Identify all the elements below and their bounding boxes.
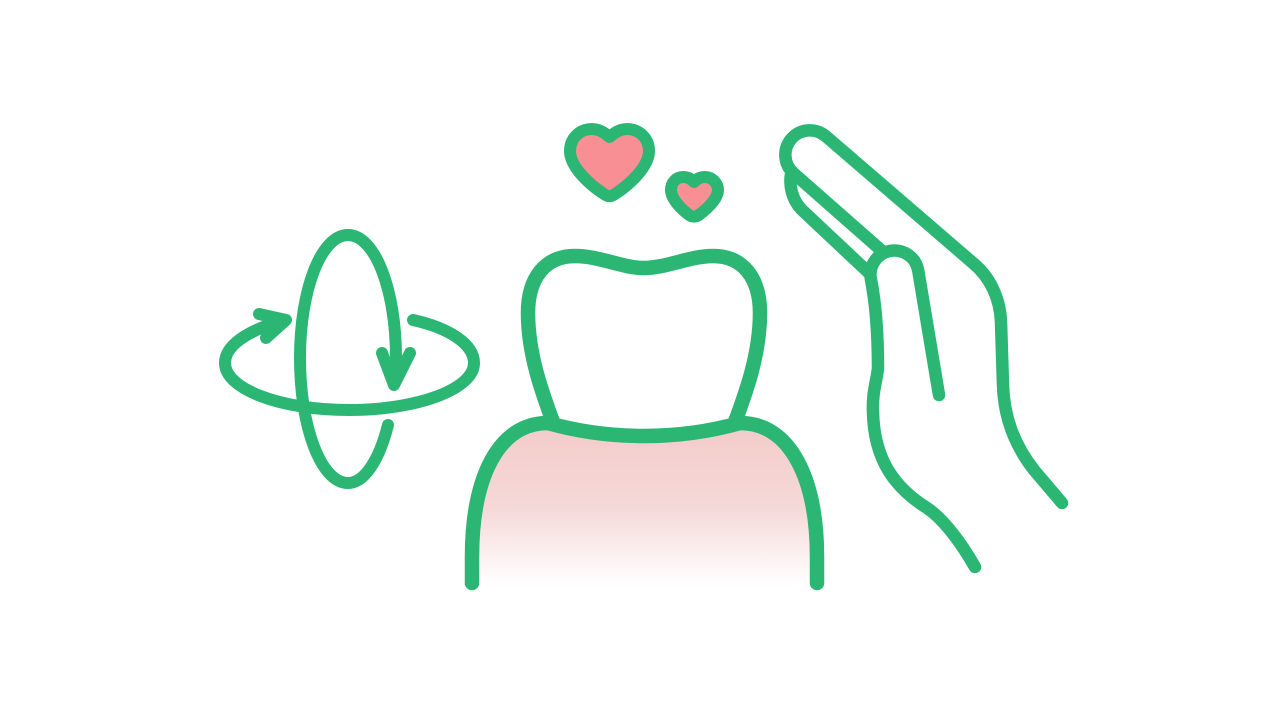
icon: large heart xyxy=(570,129,649,196)
tooth crown xyxy=(528,256,760,422)
icon: hand with floss xyxy=(785,130,1062,567)
gum xyxy=(472,423,817,585)
icon: small heart xyxy=(671,177,718,217)
icon: rotation arrows xyxy=(225,235,474,483)
